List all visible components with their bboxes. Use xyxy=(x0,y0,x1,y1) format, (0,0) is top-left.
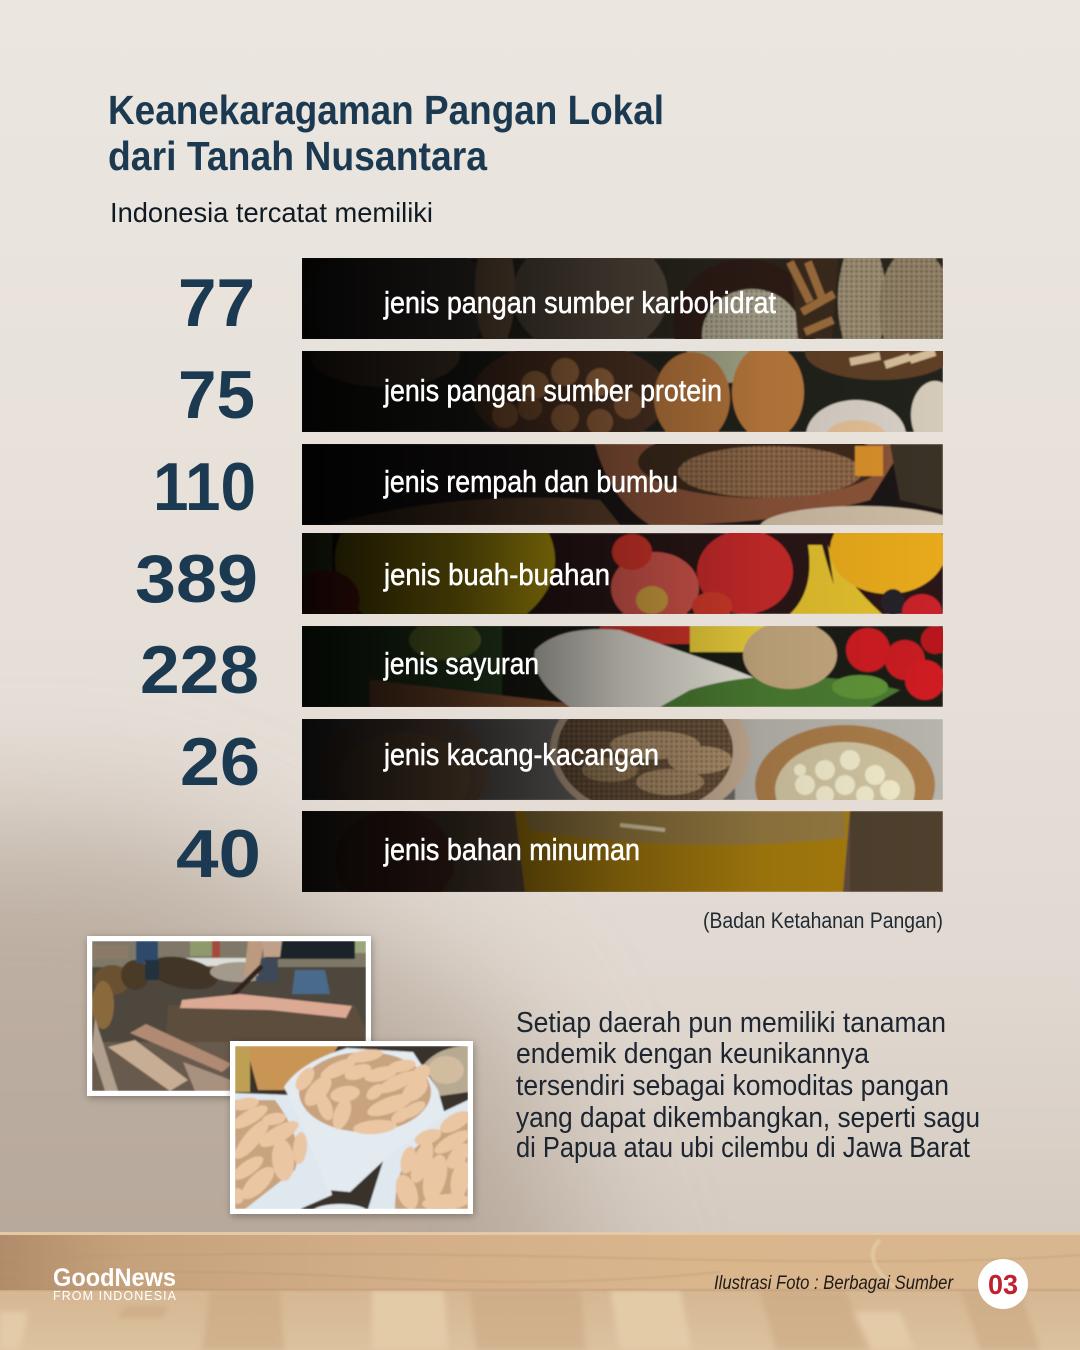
photo: ubi cilembu sacks xyxy=(229,1041,474,1220)
title: dari Tanah Nusantara xyxy=(108,133,488,179)
page number badge xyxy=(978,1259,1028,1309)
logo: GoodNews from Indonesia xyxy=(53,1264,177,1303)
statistic numbers: 389 xyxy=(135,541,258,617)
logo: GoodNews from Indonesia: FROM INDONESIA xyxy=(53,1289,177,1303)
statistic numbers: 40 xyxy=(176,816,261,892)
row labels: jenis bahan minuman xyxy=(383,832,640,867)
logo: GoodNews from Indonesia: GoodNews xyxy=(53,1264,176,1292)
body paragraph: yang dapat dikembangkan, seperti sagu xyxy=(516,1102,980,1134)
statistic numbers: 75 xyxy=(178,357,255,433)
statistic numbers: 77 xyxy=(178,265,255,341)
statistic numbers: 110 xyxy=(153,449,256,525)
source note: (Badan Ketahanan Pangan) xyxy=(703,908,943,933)
title xyxy=(108,87,664,179)
row labels: jenis sayuran xyxy=(383,646,539,681)
row labels xyxy=(383,285,776,867)
row: rempah xyxy=(302,444,943,525)
statistic numbers: 228 xyxy=(140,632,259,708)
row: protein xyxy=(302,351,943,432)
body paragraph: tersendiri sebagai komoditas pangan xyxy=(516,1070,949,1102)
body paragraph: Setiap daerah pun memiliki tanaman xyxy=(516,1007,946,1039)
photo: sago harvest xyxy=(87,936,371,1096)
subtitle: Indonesia tercatat memiliki xyxy=(110,197,433,228)
row: buah xyxy=(302,533,943,614)
photo credit: Ilustrasi Foto : Berbagai Sumber xyxy=(714,1273,954,1294)
statistic numbers xyxy=(135,265,261,892)
row: kacang xyxy=(302,719,943,800)
row: minuman xyxy=(302,811,943,892)
wooden floor xyxy=(0,1232,1080,1350)
statistic numbers: 26 xyxy=(180,724,260,800)
body paragraph: endemik dengan keunikannya xyxy=(516,1038,870,1070)
row labels: jenis rempah dan bumbu xyxy=(383,464,678,499)
title: Keanekaragaman Pangan Lokal xyxy=(108,87,664,133)
row: karbohidrat xyxy=(302,258,943,339)
row labels: jenis buah-buahan xyxy=(383,557,610,592)
body paragraph xyxy=(516,1007,980,1164)
row labels: jenis kacang-kacangan xyxy=(383,737,659,772)
row: sayuran xyxy=(302,620,949,707)
body paragraph: di Papua atau ubi cilembu di Jawa Barat xyxy=(516,1132,970,1164)
row labels: jenis pangan sumber karbohidrat xyxy=(383,285,776,320)
page number badge: 03 xyxy=(988,1269,1018,1300)
row labels: jenis pangan sumber protein xyxy=(383,373,722,408)
